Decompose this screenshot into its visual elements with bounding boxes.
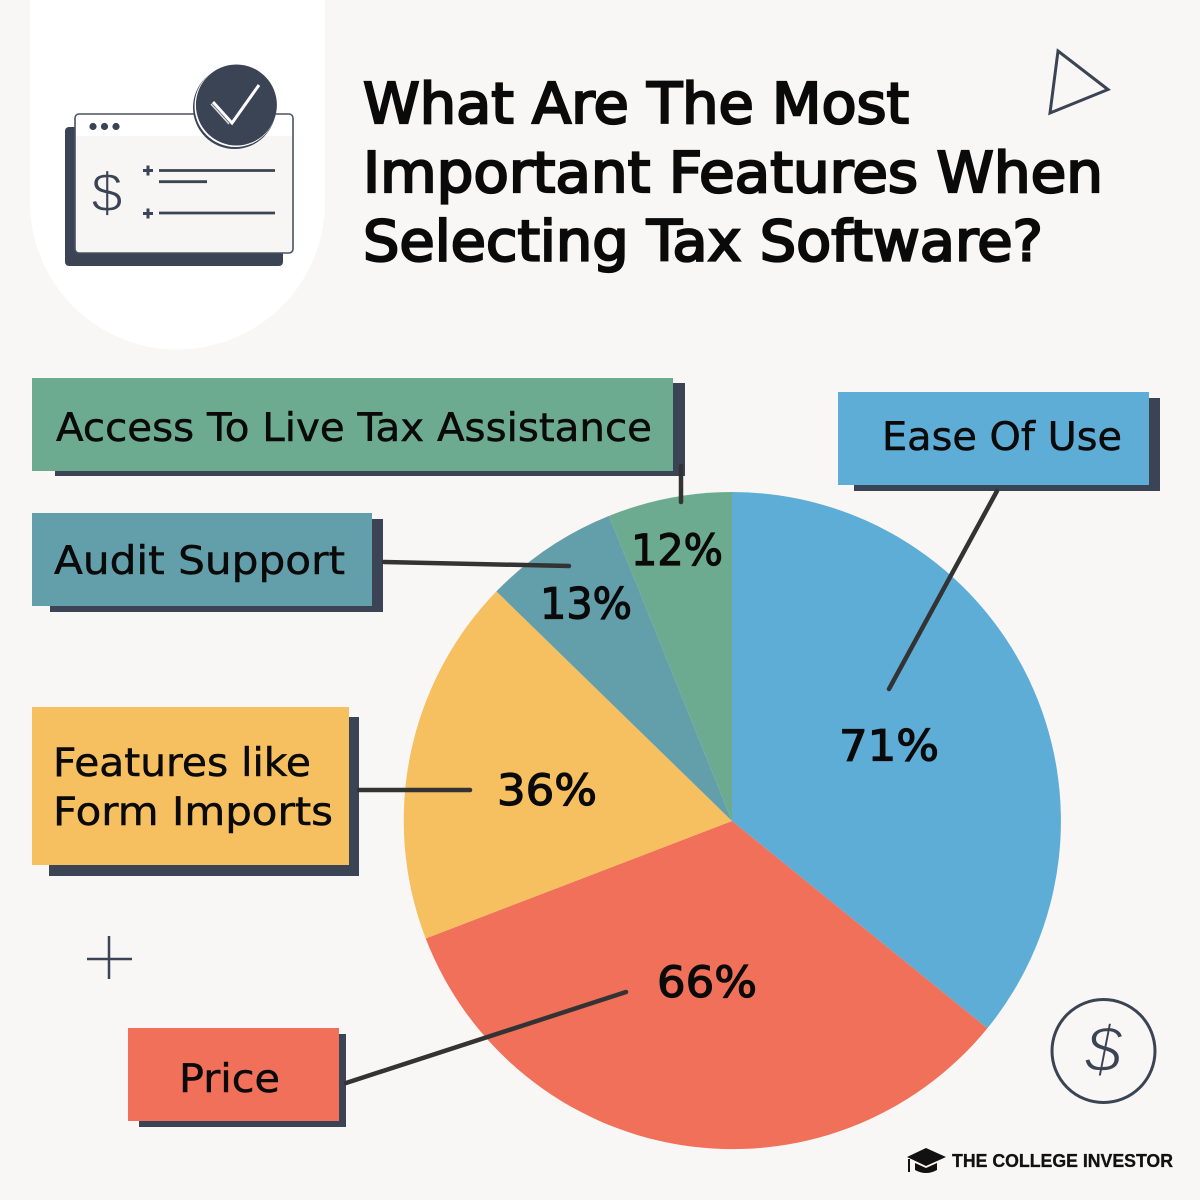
percentage values: 36% <box>497 766 597 816</box>
title: Important Features When <box>363 141 1103 206</box>
icon: dollar circle: $ <box>1084 1012 1123 1086</box>
icon: dollar circle <box>1052 1000 1155 1102</box>
label: Features like Form Imports: Form Imports <box>53 789 333 835</box>
label: Audit Support: Audit Support <box>54 538 345 584</box>
label: Price <box>128 1028 346 1127</box>
white header blob <box>30 0 325 350</box>
icon: tax software window <box>65 64 293 266</box>
logo: The College Investor <box>907 1148 1173 1173</box>
label: Price: Price <box>179 1056 280 1102</box>
percentage values <box>497 526 939 1008</box>
percentage values: 71% <box>839 722 939 772</box>
label: Audit Support <box>32 513 383 612</box>
leader lines <box>346 466 997 1083</box>
label: Features like Form Imports: Features like <box>53 740 311 786</box>
icon: plus <box>87 936 132 979</box>
label: Ease Of Use <box>838 392 1160 491</box>
percentage values: 13% <box>540 580 632 630</box>
icon: tax software window: $ <box>91 161 123 224</box>
icon: triangle outline <box>1050 51 1108 113</box>
label: Access To Live Tax Assistance <box>32 378 685 476</box>
label: Features like Form Imports <box>32 707 359 876</box>
percentage values: 66% <box>657 958 757 1008</box>
title <box>363 72 1103 274</box>
pie chart <box>404 492 1061 1149</box>
logo: The College Investor: THE COLLEGE INVESTOR <box>952 1151 1173 1171</box>
title: What Are The Most <box>363 72 909 137</box>
percentage values: 12% <box>631 526 723 576</box>
title: Selecting Tax Software? <box>363 210 1043 274</box>
label: Access To Live Tax Assistance: Access To Live Tax Assistance <box>56 405 652 451</box>
label: Ease Of Use: Ease Of Use <box>882 414 1122 460</box>
